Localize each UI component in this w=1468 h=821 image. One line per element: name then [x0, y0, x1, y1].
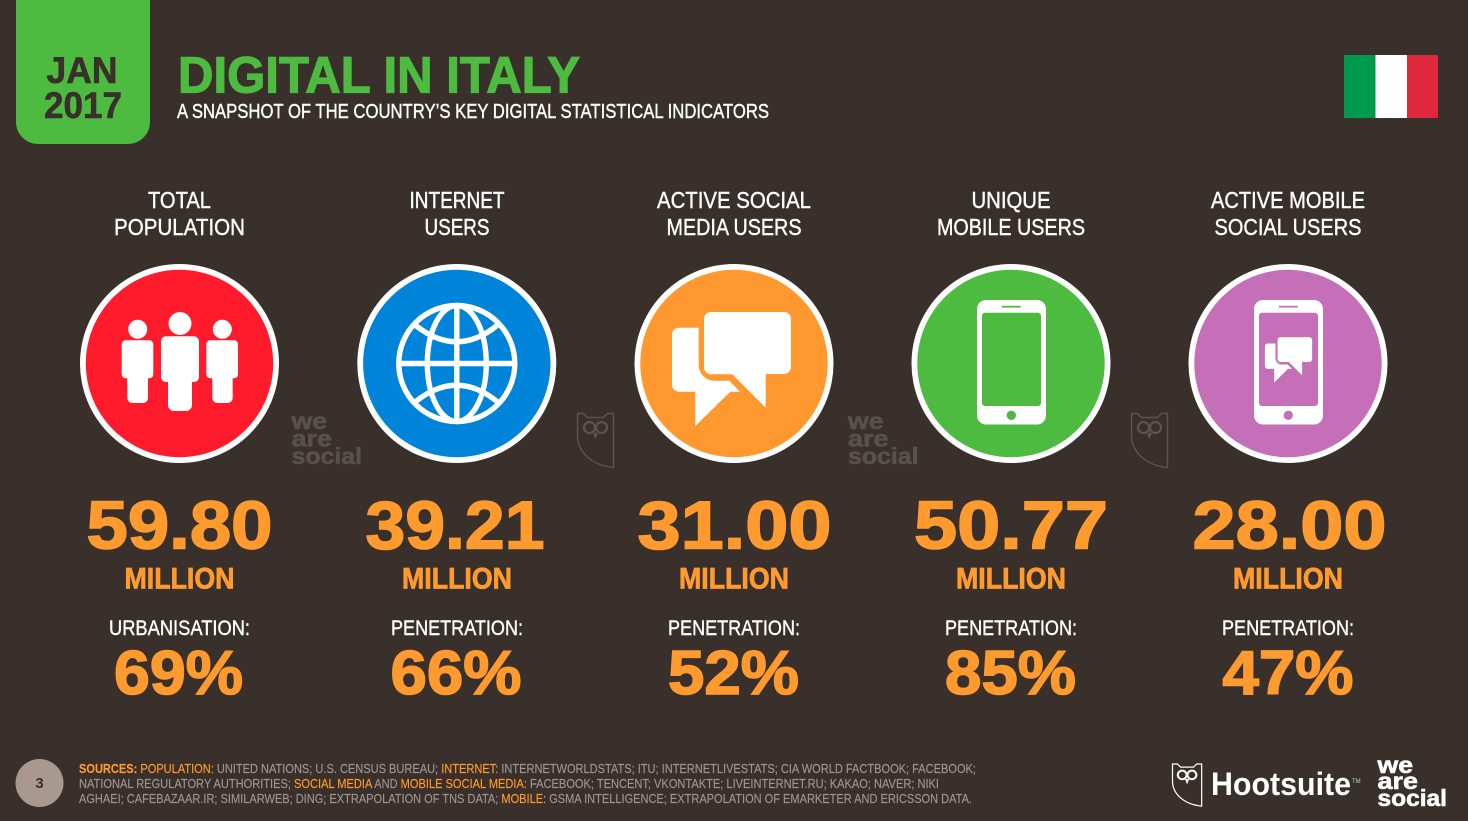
sources: AGHAEI; CAFEBAZAAR.IR; SIMILARWEB; DING; EXTRAPOLATION OF TNS DATA; MOBILE: GSMA INTELLIGENCE; EXTRAPOLATION OF EMARKETER AND ERICSSON DATA.	[79, 792, 972, 806]
page number: 3	[35, 775, 44, 792]
watermark: we are social 1	[290, 408, 362, 469]
panel: active mobile social users: ACTIVE MOBILE	[1211, 187, 1365, 213]
value: 59.80	[86, 488, 272, 564]
watermark: we are social 1: are	[292, 426, 332, 452]
panel: unique mobile users: UNIQUE	[972, 187, 1050, 213]
urbanisation value: 69%	[114, 639, 243, 708]
panel: active social media users: MEDIA USERS	[666, 214, 802, 240]
title: DIGITAL IN ITALY	[178, 46, 580, 104]
value: 31.00	[638, 488, 832, 564]
logo: we are social: are	[1378, 768, 1418, 794]
panel: unique mobile users: MOBILE USERS	[937, 214, 1085, 240]
panel: total population: POPULATION	[114, 214, 245, 240]
watermark: we are social 2	[847, 408, 918, 469]
watermark: we are social 2: are	[848, 426, 888, 452]
icon: smartphone	[912, 264, 1110, 463]
panel: total population: TOTAL	[148, 187, 211, 213]
panel: active mobile social users	[1188, 187, 1388, 708]
penetration value: 47%	[1222, 639, 1354, 708]
logo: we are social: social	[1378, 785, 1447, 811]
unit: MILLION	[124, 562, 234, 596]
panel: active social media users: ACTIVE SOCIAL	[657, 187, 811, 213]
icon: globe	[357, 264, 556, 463]
page number	[16, 759, 64, 807]
watermark: we are social 2: social	[848, 443, 918, 469]
panel: unique mobile users	[912, 187, 1110, 708]
date tab	[16, 0, 150, 144]
logo: Hootsuite	[1172, 764, 1361, 806]
penetration value: 66%	[390, 639, 522, 708]
subtitle: A SNAPSHOT OF THE COUNTRY’S KEY DIGITAL STATISTICAL INDICATORS	[177, 101, 769, 123]
sources	[79, 762, 976, 806]
unit: MILLION	[956, 562, 1066, 596]
penetration label: PENETRATION:	[945, 617, 1077, 640]
value: 39.21	[366, 488, 544, 564]
value: 50.77	[914, 488, 1108, 564]
unit: MILLION	[402, 562, 512, 596]
panel: total population	[80, 187, 279, 708]
watermark: owl 1	[578, 414, 614, 468]
penetration value: 85%	[945, 639, 1076, 708]
date tab: 2017	[44, 85, 122, 126]
panel: internet users	[357, 187, 556, 708]
panel: active mobile social users: SOCIAL USERS	[1214, 214, 1362, 240]
logo: Hootsuite: Hootsuite	[1211, 766, 1351, 802]
panel: internet users: USERS	[424, 214, 490, 240]
penetration label: PENETRATION:	[1222, 617, 1354, 640]
logo: Hootsuite: TM	[1352, 779, 1361, 785]
flag: Italy	[1344, 55, 1438, 118]
watermark: we are social 1: we	[290, 408, 327, 434]
icon: smartphone with chat	[1188, 264, 1388, 463]
date tab: JAN	[46, 50, 118, 91]
icon: people	[80, 264, 279, 463]
watermark: we are social 2: we	[847, 408, 884, 434]
unit: MILLION	[1233, 562, 1343, 596]
penetration label: PENETRATION:	[668, 617, 800, 640]
icon: chat bubbles	[634, 264, 834, 463]
panel: internet users: INTERNET	[410, 187, 504, 213]
penetration value: 52%	[668, 639, 799, 708]
value: 28.00	[1192, 488, 1386, 564]
logo: we are social: we	[1376, 752, 1413, 778]
watermark: owl 2	[1132, 414, 1168, 468]
watermark: we are social 1: social	[292, 443, 362, 469]
unit: MILLION	[679, 562, 789, 596]
urbanisation label: URBANISATION:	[109, 617, 250, 640]
panel: active social media users	[634, 187, 834, 708]
logo: we are social	[1376, 752, 1447, 811]
sources: NATIONAL REGULATORY AUTHORITIES; SOCIAL MEDIA AND MOBILE SOCIAL MEDIA: FACEBOOK; TENCENT; VKONTAKTE; LIVEINTERNET.RU; KAKAO; NAVER; NIKI	[79, 777, 939, 791]
sources: SOURCES: POPULATION: UNITED NATIONS; U.S. CENSUS BUREAU; INTERNET: INTERNETWORLDSTATS; ITU; INTERNETLIVESTATS; CIA WORLD FACTBOOK; FACEBOOK;	[79, 762, 976, 776]
penetration label: PENETRATION:	[391, 617, 523, 640]
